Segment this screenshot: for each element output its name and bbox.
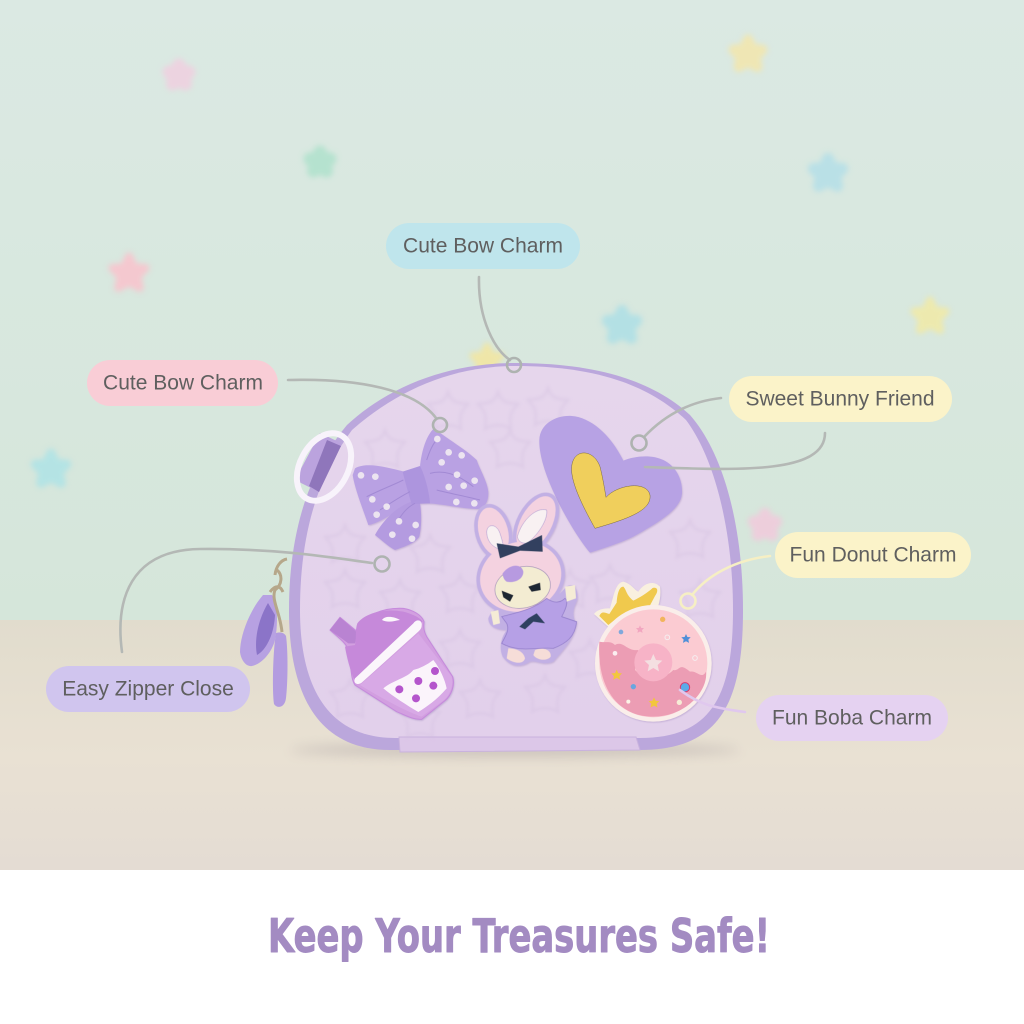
zipper edge xyxy=(289,363,743,750)
quilted star texture xyxy=(325,388,720,737)
charm: bow xyxy=(353,428,488,550)
purse xyxy=(240,363,743,752)
white footer band xyxy=(0,870,1024,1024)
bag shadow xyxy=(290,743,740,757)
callout: pink bow label: Cute Bow Charm xyxy=(103,372,263,394)
callout: zipper label xyxy=(46,549,390,712)
bag front xyxy=(300,366,733,738)
charm: bunny xyxy=(468,485,577,666)
callout: top bow label xyxy=(386,223,580,372)
callout: bunny label xyxy=(632,376,952,469)
callout: top bow label: Cute Bow Charm xyxy=(403,234,563,258)
callout: pink bow label xyxy=(87,360,447,432)
bunny outline and body xyxy=(488,585,577,666)
callout: donut label: Fun Donut Charm xyxy=(790,544,956,566)
charm: heart xyxy=(539,416,682,553)
charm: boba xyxy=(330,608,453,719)
callout: donut label xyxy=(680,532,971,608)
white key ring xyxy=(286,424,362,510)
strap loop xyxy=(295,433,341,492)
background wall xyxy=(0,0,1024,622)
floating background stars xyxy=(35,40,946,535)
charm: donut xyxy=(594,582,712,722)
bottom hinge xyxy=(399,737,640,752)
callout: boba label xyxy=(680,690,948,741)
floor xyxy=(0,620,1024,870)
callout: boba label: Fun Boba Charm xyxy=(772,706,932,730)
zipper pull xyxy=(240,559,288,707)
callout: bunny label: Sweet Bunny Friend xyxy=(745,388,935,410)
title: Keep Your Treasures Safe! xyxy=(268,909,770,963)
callout: zipper label: Easy Zipper Close xyxy=(62,678,234,700)
charms xyxy=(330,416,712,722)
